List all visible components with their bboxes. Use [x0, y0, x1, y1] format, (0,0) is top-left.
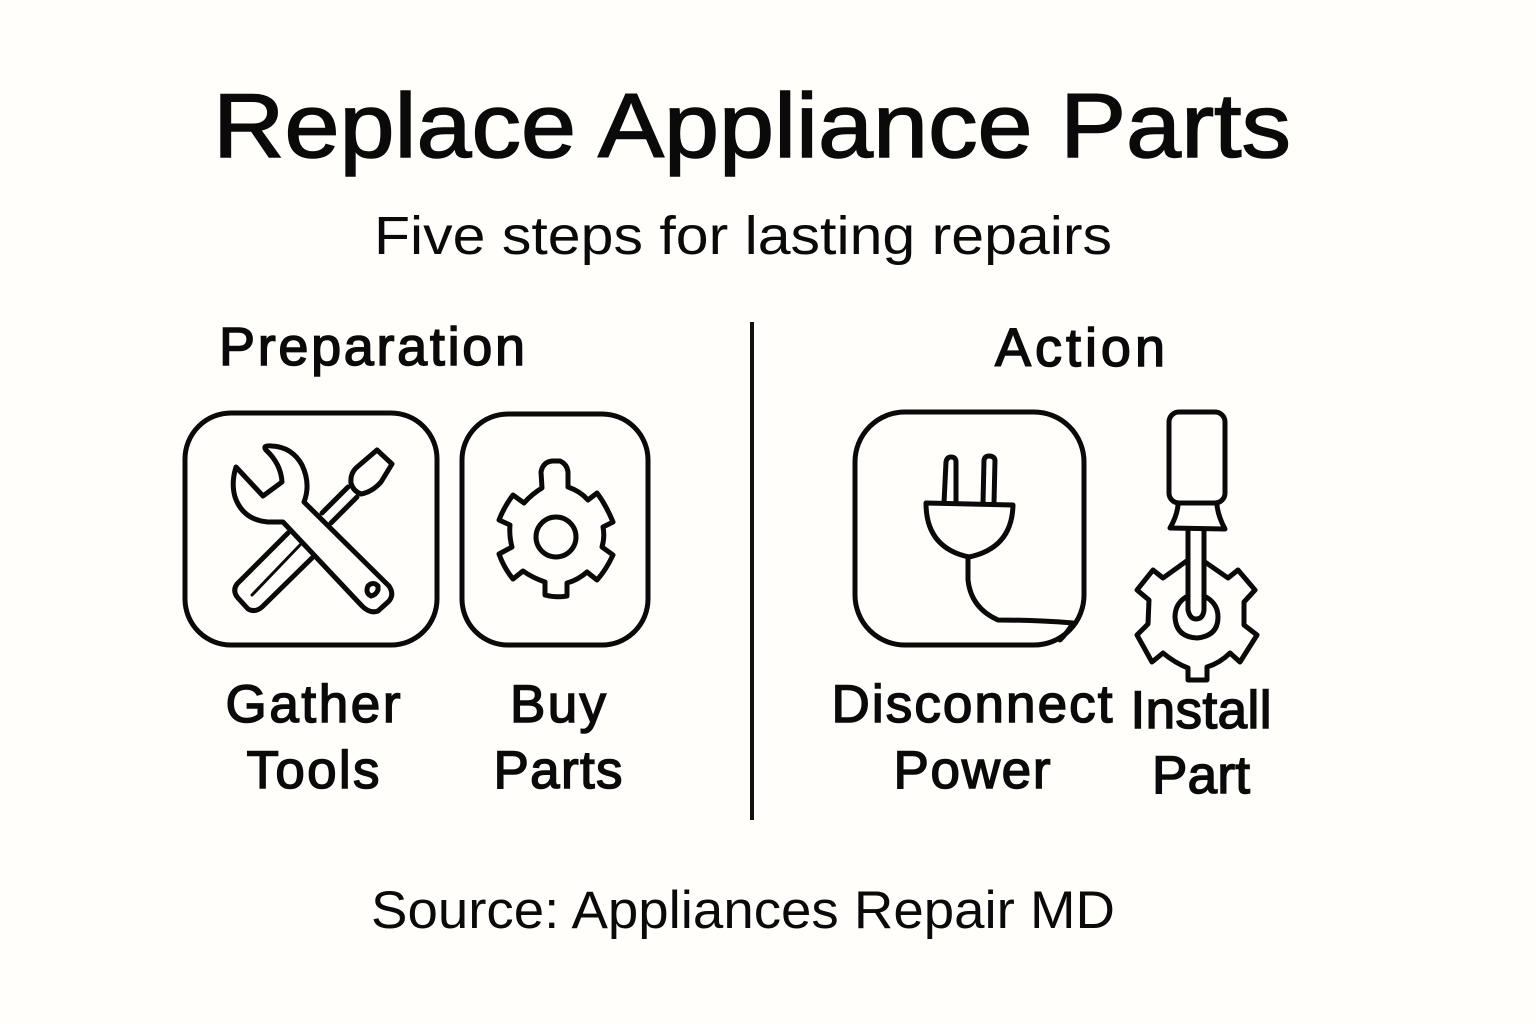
- icon: screwdriver on gear: [1137, 412, 1257, 680]
- right prong: [983, 456, 995, 503]
- divider line: [750, 322, 754, 820]
- heading: Preparation: Preparation: [219, 317, 525, 377]
- screwdriver blade: [351, 450, 392, 494]
- gear: [499, 461, 613, 597]
- label: Buy Parts: Buy: [510, 675, 606, 734]
- label: Install Part: [1130, 681, 1272, 805]
- label: Buy Parts: Parts: [494, 741, 622, 800]
- ferrule: [1170, 505, 1225, 529]
- title: Replace Appliance Parts: [213, 76, 1291, 177]
- tile outline: [185, 413, 437, 645]
- heading: Action: Action: [995, 318, 1165, 378]
- label: Disconnect Power: [832, 675, 1113, 800]
- cord: [968, 557, 1073, 640]
- label: Gather Tools: Gather: [226, 675, 400, 734]
- source: Source: Appliances Repair MD: [371, 881, 1115, 940]
- icon: wrench and screwdriver: [185, 413, 437, 645]
- label: Disconnect Power: Disconnect: [832, 675, 1113, 734]
- label: Gather Tools: [226, 675, 400, 800]
- label: Gather Tools: Tools: [246, 741, 380, 800]
- plug body: [926, 503, 1013, 557]
- hub ring: [1175, 597, 1218, 638]
- label: Buy Parts: [494, 675, 622, 800]
- shaft: [1188, 531, 1204, 619]
- gear: [1137, 560, 1257, 680]
- tile outline: [462, 414, 648, 645]
- handle: [1169, 412, 1225, 503]
- tile outline: [855, 412, 1084, 645]
- screwdriver handle: [235, 533, 312, 611]
- handle highlight: [252, 545, 300, 595]
- wrench: [233, 446, 392, 612]
- subtitle: Five steps for lasting repairs: [374, 206, 1112, 266]
- icon: plug in rounded box: [855, 412, 1084, 645]
- label: Install Part: Install: [1130, 681, 1272, 740]
- label: Disconnect Power: Power: [894, 741, 1050, 800]
- wrench hole: [367, 584, 378, 596]
- left prong: [944, 457, 956, 503]
- icon: gear in rounded box: [462, 414, 648, 645]
- label: Install Part: Part: [1152, 746, 1250, 805]
- screwdriver shaft: [322, 487, 357, 523]
- gear hub: [536, 517, 576, 557]
